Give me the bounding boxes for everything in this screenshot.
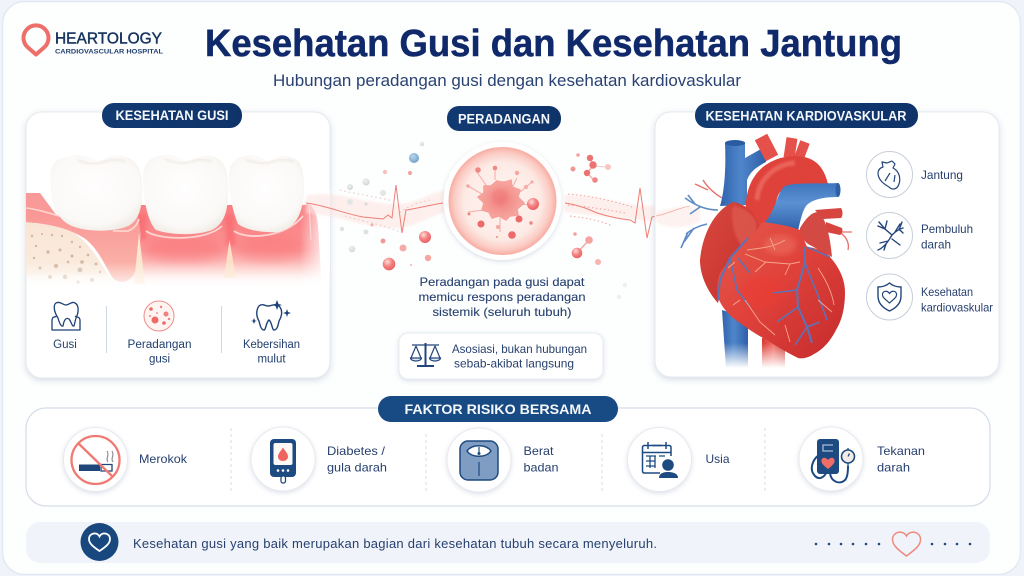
- icon: heart outline: [866, 152, 912, 198]
- logo name: HEARTOLOGY: [55, 30, 162, 48]
- upper vein: [720, 142, 766, 206]
- icon: no smoking: [64, 428, 128, 492]
- label: berat badan: Berat: [524, 444, 554, 458]
- subtitle: Hubungan peradangan gusi dengan kesehatan kardiovaskular: [273, 72, 742, 90]
- heading: kesehatan gusi: [102, 103, 242, 128]
- panel: kesehatan gusi: [26, 112, 330, 378]
- footer message: Kesehatan gusi yang baik merupakan bagian dari kesehatan tubuh secara menyeluruh.: [133, 536, 657, 551]
- descending vessels: [722, 310, 748, 368]
- icon: gum inflammation: [144, 301, 174, 331]
- bone pores: [31, 233, 101, 284]
- callout: asosiasi: Asosiasi, bukan hubungan: [452, 342, 587, 356]
- panel: kesehatan kardiovaskular: [655, 112, 999, 377]
- label: merokok: Merokok: [139, 452, 188, 466]
- callout: asosiasi: [399, 333, 603, 379]
- ventricle: [717, 222, 845, 358]
- panel background: [655, 112, 999, 377]
- gum body: [130, 204, 320, 279]
- external branches: [695, 180, 852, 250]
- interdental triangles: [134, 233, 145, 285]
- gum flap: [27, 216, 141, 282]
- wave band and ecg left: [306, 185, 450, 233]
- callout: asosiasi: sebab-akibat langsung: [454, 356, 574, 370]
- label: kesehatan kardiovaskular: kardiovaskular: [921, 300, 993, 314]
- text: peradangan description: sistemik (seluruh tubuh): [432, 305, 572, 319]
- label: peradangan gusi: gusi: [149, 354, 170, 366]
- pulmonary artery: [765, 183, 840, 232]
- label: pembuluh darah: darah: [921, 238, 951, 252]
- heading: peradangan: [447, 106, 561, 131]
- label: diabetes / gula darah: Diabetes /: [327, 444, 386, 458]
- left lobe: [700, 202, 760, 303]
- title: Kesehatan Gusi dan Kesehatan Jantung: [205, 23, 902, 65]
- logo: Heartology: [24, 25, 163, 56]
- wave band and ecg right: [565, 188, 700, 238]
- label: kebersihan mulut: Kebersihan: [243, 339, 300, 351]
- illustration: anatomical heart: [681, 137, 852, 368]
- label: berat badan: badan: [524, 460, 558, 474]
- logo subtitle: CARDIOVASCULAR HOSPITAL: [55, 48, 163, 56]
- label: jantung: Jantung: [921, 168, 963, 182]
- panel background: [26, 112, 330, 378]
- heading: kesehatan kardiovaskular: KESEHATAN KARDIOVASKULAR: [706, 108, 907, 124]
- icon: logo pin: [24, 25, 49, 54]
- text: peradangan description: Peradangan pada gusi dapat: [420, 275, 585, 289]
- aorta branches: [761, 137, 805, 158]
- label: gusi: Gusi: [53, 339, 77, 351]
- panel: peradangan: [306, 142, 700, 379]
- illustration: teeth and gums: [26, 156, 330, 285]
- right side branches: [815, 208, 842, 235]
- label: kebersihan mulut: mulut: [257, 354, 286, 366]
- label: pembuluh darah: Pembuluh: [921, 222, 973, 236]
- veins: [718, 238, 830, 345]
- icon: gum tooth: [52, 302, 80, 330]
- heading: peradangan: PERADANGAN: [458, 112, 550, 126]
- label: peradangan gusi: Peradangan: [128, 339, 192, 351]
- label: diabetes / gula darah: gula darah: [327, 460, 387, 474]
- icon: shield heart: [866, 274, 912, 320]
- label: tekanan darah: darah: [877, 460, 910, 474]
- label: kesehatan kardiovaskular: Kesehatan: [921, 285, 973, 299]
- bone: [26, 222, 110, 278]
- text: peradangan description: memicu respons peradangan: [418, 290, 586, 304]
- heading: kesehatan kardiovaskular: [695, 103, 918, 128]
- icon: footer heart badge: [80, 523, 118, 561]
- right atrium: [800, 212, 832, 257]
- aorta arch: [761, 171, 814, 232]
- heading: kesehatan gusi: KESEHATAN GUSI: [116, 108, 228, 123]
- footer banner: [26, 522, 990, 563]
- heading: faktor risiko bersama: FAKTOR RISIKO BERSAMA: [404, 401, 592, 417]
- icon: blood vessels: [866, 212, 912, 258]
- panel: faktor risiko bersama: [26, 408, 990, 506]
- icon: clean tooth: [251, 300, 291, 330]
- icon: inflamed cell: [444, 142, 562, 260]
- icon: balance scale: [410, 343, 440, 366]
- particles: [340, 142, 627, 299]
- decorative heart and dots: [815, 532, 971, 556]
- divider: [106, 306, 222, 353]
- left gum top band: [26, 193, 56, 223]
- teeth: [50, 155, 142, 231]
- label: usia: Usia: [706, 452, 730, 466]
- icon: weight scale: [447, 428, 511, 492]
- label: tekanan darah: Tekanan: [877, 444, 925, 458]
- icon: calendar person: [628, 428, 692, 492]
- icon: blood pressure monitor: [799, 427, 863, 491]
- heading: faktor risiko bersama: [378, 396, 618, 422]
- icon: glucose meter: [251, 427, 315, 491]
- gum highlight line: [113, 216, 303, 238]
